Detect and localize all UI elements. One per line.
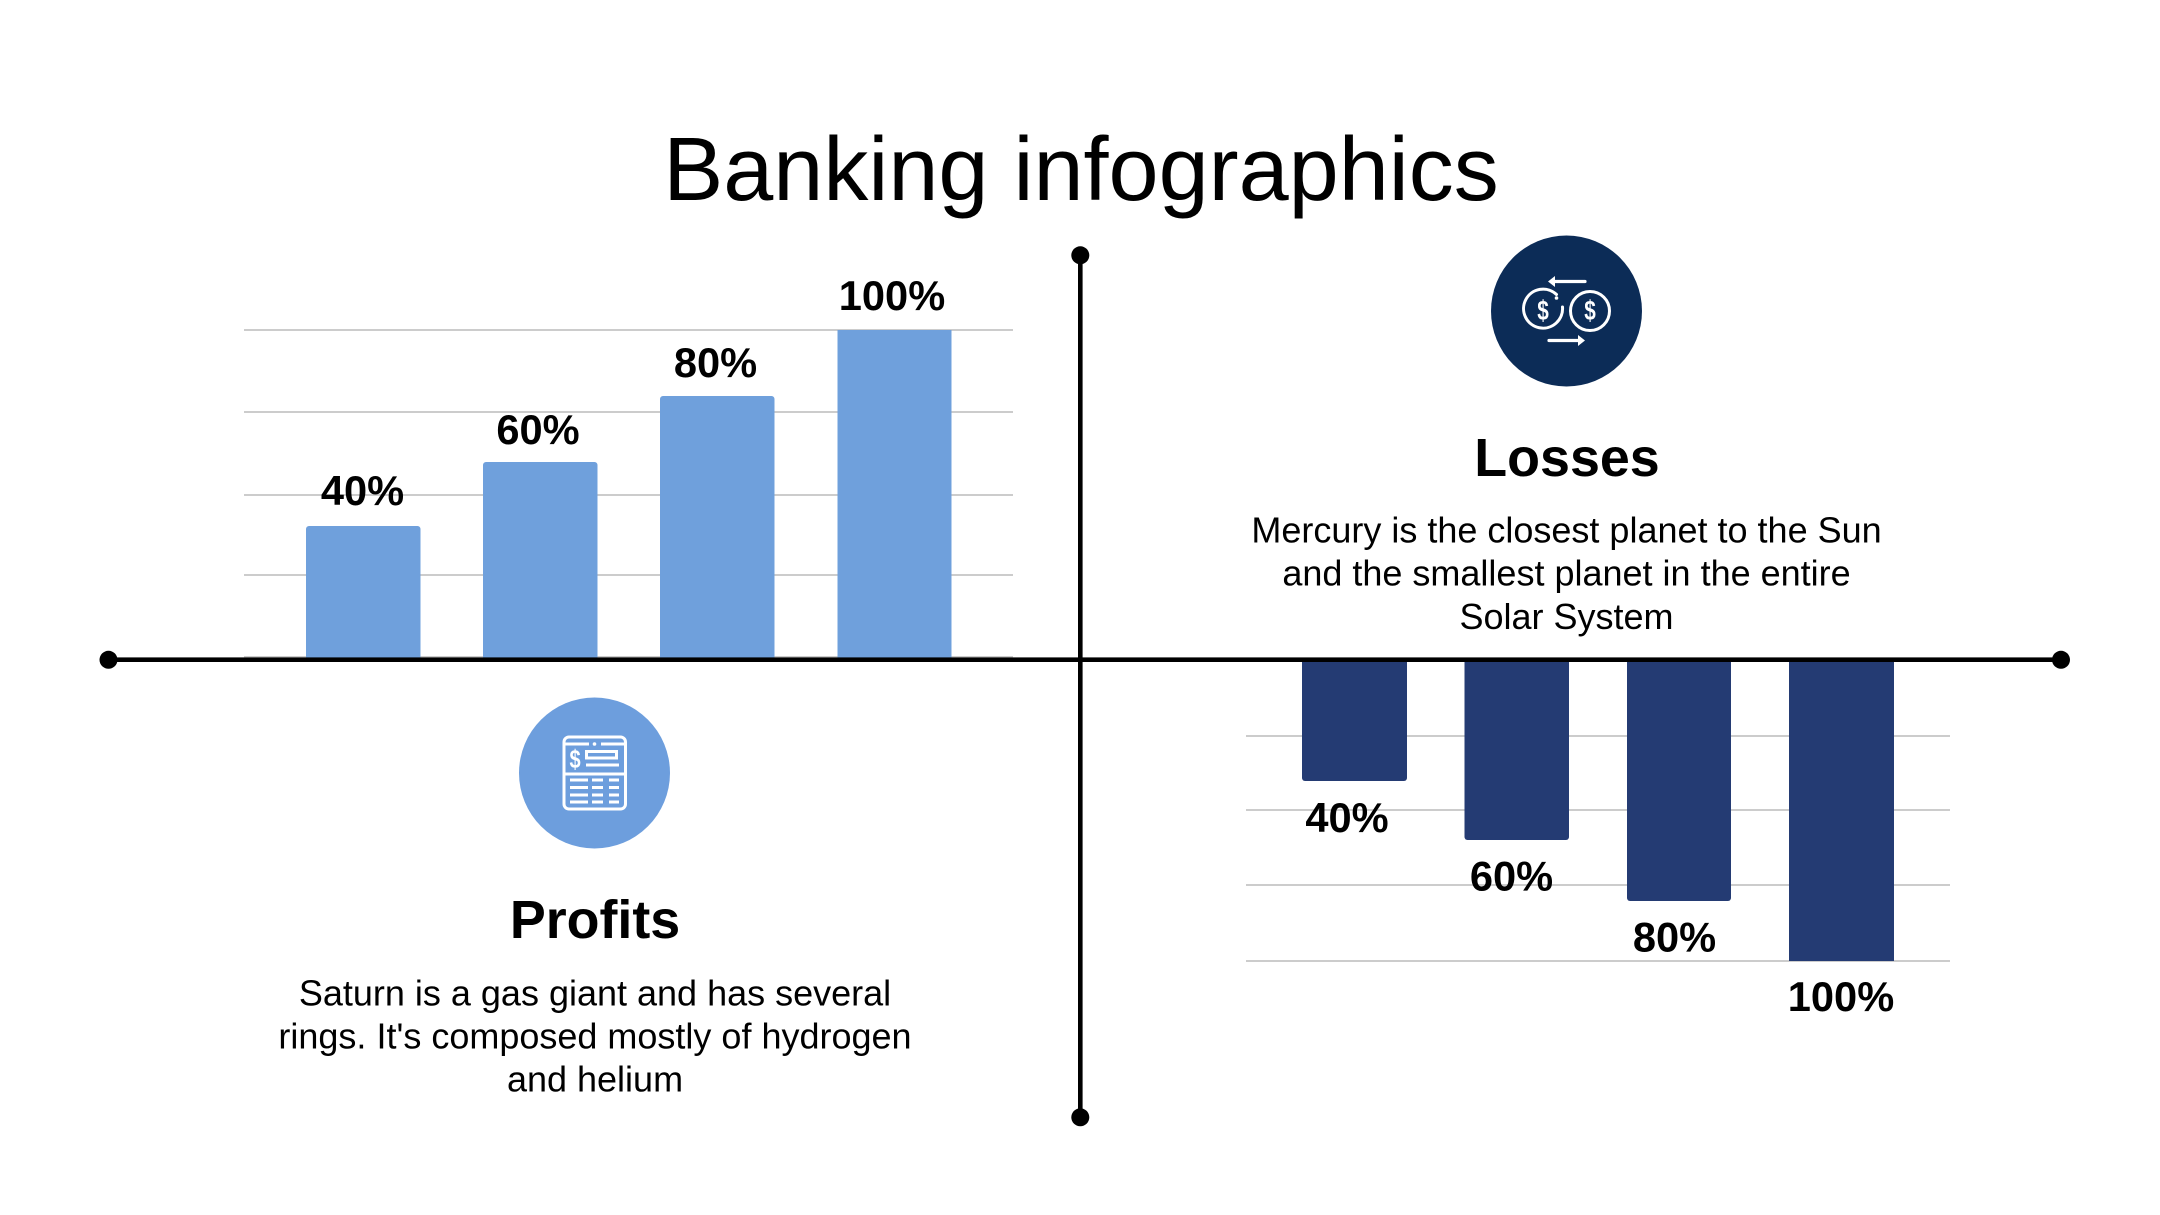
label: profits 40%: 40% bbox=[321, 467, 404, 514]
bar chart: losses bbox=[1246, 659, 1950, 1020]
label: profits 80%: 80% bbox=[674, 339, 757, 386]
bar: losses 100% bbox=[1789, 659, 1894, 961]
heading: losses: Losses bbox=[1474, 428, 1660, 488]
text block: losses bbox=[1251, 510, 1882, 637]
bar: losses 80% bbox=[1627, 659, 1731, 901]
text block: profits: rings. It's composed mostly of hydrogen bbox=[278, 1016, 912, 1056]
title: Banking infographics bbox=[663, 120, 1499, 220]
label: profits 60%: 60% bbox=[496, 406, 580, 453]
heading: profits: Profits bbox=[510, 890, 680, 950]
bar: losses 60% bbox=[1464, 659, 1569, 840]
text block: losses: Solar System bbox=[1459, 596, 1674, 637]
bar: profits 100% bbox=[838, 330, 952, 658]
bar: profits 60% bbox=[483, 462, 598, 658]
horizontal axis with end dots bbox=[100, 651, 2070, 669]
label: losses 60%: 60% bbox=[1470, 852, 1553, 900]
text block: losses: and the smallest planet in the entire bbox=[1282, 552, 1851, 594]
icon text: dollar signs: $ bbox=[1584, 296, 1596, 327]
label: losses 80%: 80% bbox=[1633, 914, 1716, 960]
vertical axis with end dots bbox=[1071, 246, 1089, 1126]
label: profits 100%: 100% bbox=[839, 272, 945, 319]
icon: financial report bbox=[519, 698, 670, 848]
bar: profits 40% bbox=[306, 526, 420, 658]
icon text: dollar signs: $ bbox=[1537, 296, 1549, 327]
text block: profits: and helium bbox=[507, 1058, 683, 1100]
label: losses 100%: 100% bbox=[1788, 973, 1894, 1020]
text block: losses: Mercury is the closest planet to the Sun bbox=[1251, 510, 1882, 550]
bar chart: profits bbox=[244, 272, 1013, 658]
icon text: dollar sign: $ bbox=[569, 744, 581, 774]
text block: profits: Saturn is a gas giant and has several bbox=[299, 972, 891, 1014]
label: losses 40%: 40% bbox=[1305, 794, 1389, 841]
text block: profits bbox=[278, 972, 912, 1100]
bar: losses 40% bbox=[1302, 659, 1407, 781]
icon text: dollar signs bbox=[1537, 296, 1596, 327]
bar: profits 80% bbox=[660, 396, 774, 658]
icon: currency exchange bbox=[1491, 236, 1642, 386]
